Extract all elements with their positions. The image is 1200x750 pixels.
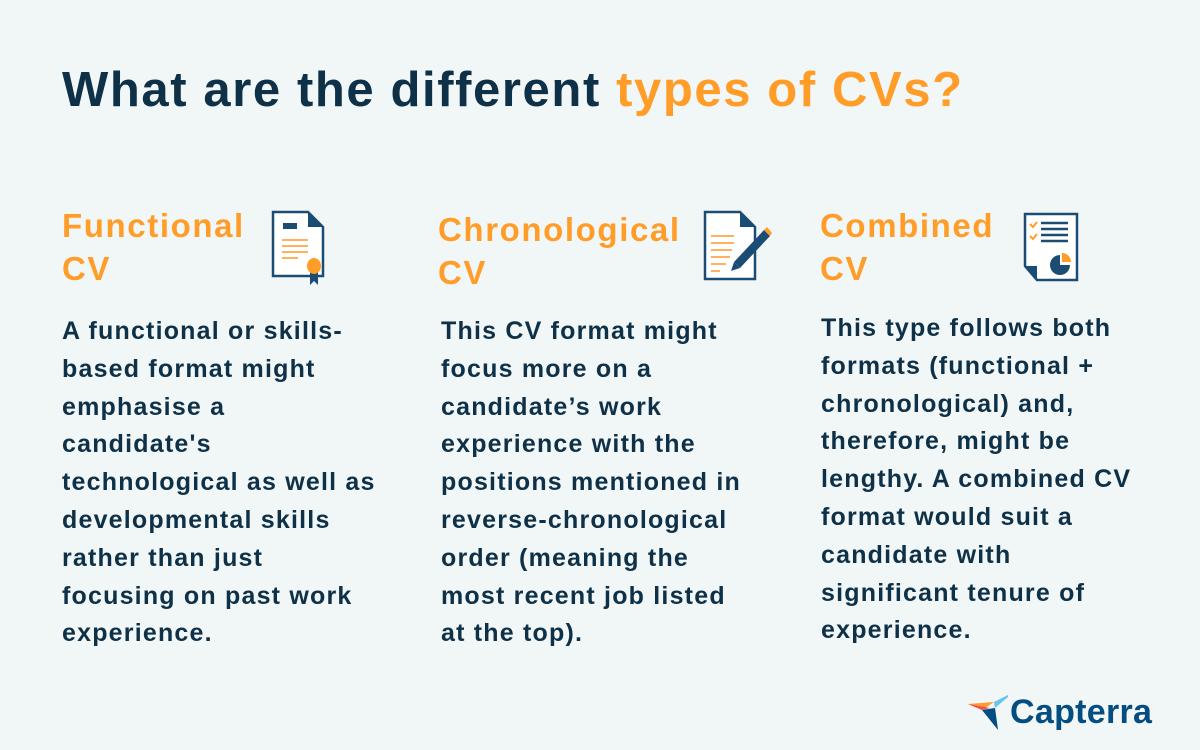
heading: functional (62, 207, 245, 287)
text: combined: This type follows both (821, 314, 1111, 342)
text: chronological: most recent job listed (441, 582, 726, 610)
text: chronological: order (meaning the (441, 544, 689, 572)
icon: document with pen (704, 210, 772, 280)
text: functional: experience. (62, 619, 213, 647)
heading: functional: CV (62, 250, 111, 287)
text: functional: technological as well as (62, 468, 376, 496)
title: What are the different types of CVs? (62, 63, 964, 117)
text: chronological: at the top). (441, 619, 583, 647)
text: functional: focusing on past work (62, 582, 352, 610)
text: combined: format would suit a (821, 503, 1073, 531)
text: combined: experience. (821, 616, 972, 644)
text: chronological: candidate’s work (441, 393, 662, 421)
text: combined: lengthy. A combined CV (821, 465, 1131, 493)
text: combined: significant tenure of (821, 579, 1085, 607)
text: functional (62, 317, 376, 647)
icon: certificate (272, 210, 324, 285)
text: chronological: focus more on a (441, 355, 652, 383)
panel: chronological (438, 210, 772, 647)
heading: combined: CV (820, 250, 869, 287)
text: combined (821, 314, 1131, 644)
logo: Capterra: Capterra (1010, 693, 1152, 731)
heading: combined (820, 207, 994, 287)
text: functional: rather than just (62, 544, 263, 572)
text: combined: chronological) and, (821, 390, 1074, 418)
text: functional: A functional or skills- (62, 317, 343, 345)
text: chronological: This CV format might (441, 317, 718, 345)
icon: report with chart (1024, 212, 1078, 282)
text: functional: developmental skills (62, 506, 331, 534)
panel: combined (820, 207, 1131, 644)
heading: chronological: Chronological (438, 211, 681, 248)
text: chronological: experience with the (441, 430, 696, 458)
text: functional: based format might (62, 355, 316, 383)
heading: combined: Combined (820, 207, 994, 244)
heading: chronological: CV (438, 254, 487, 291)
panel: functional (62, 207, 376, 647)
text: chronological: positions mentioned in (441, 468, 741, 496)
text: combined: formats (functional + (821, 352, 1094, 380)
text: functional: candidate's (62, 430, 212, 458)
text: combined: candidate with (821, 541, 1011, 569)
text: combined: therefore, might be (821, 427, 1070, 455)
text: chronological: reverse-chronological (441, 506, 727, 534)
heading: functional: Functional (62, 207, 245, 244)
heading: chronological (438, 211, 681, 291)
text: chronological (441, 317, 741, 647)
text: functional: emphasise a (62, 393, 225, 421)
